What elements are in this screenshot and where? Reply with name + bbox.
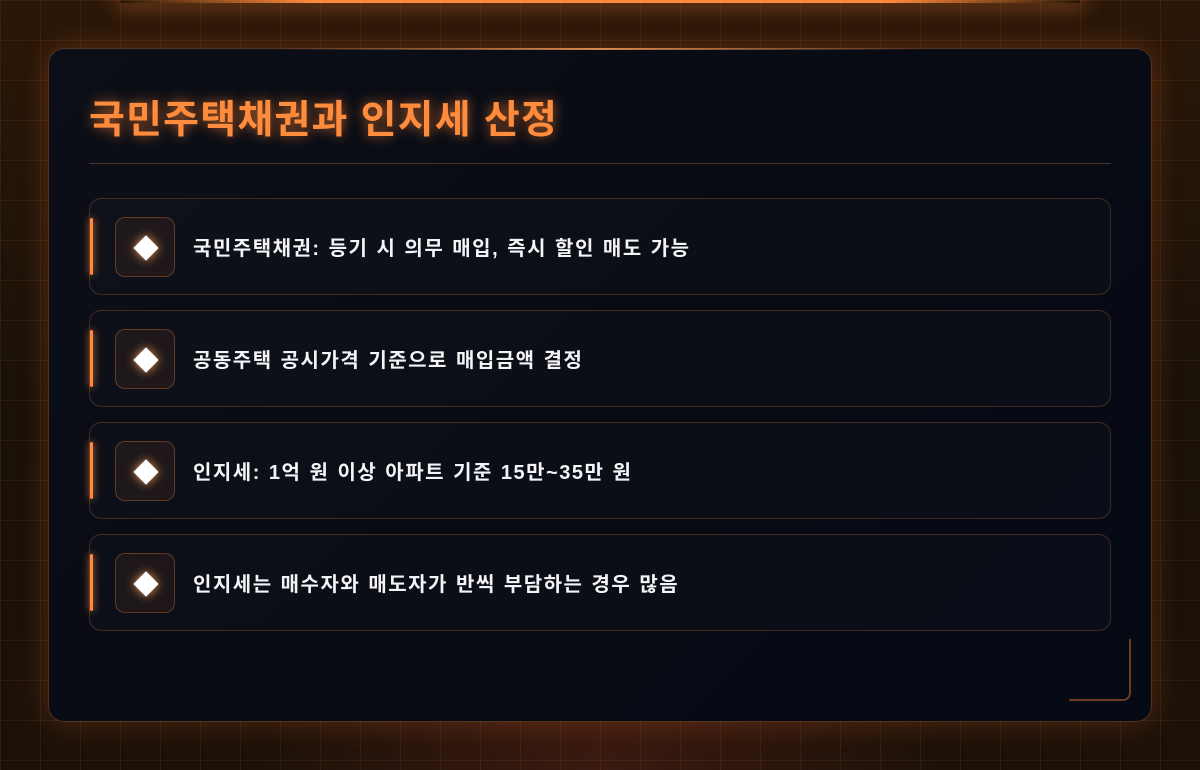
item 4 bbox=[89, 534, 1111, 631]
item 2 bbox=[89, 310, 1111, 407]
text 2: 공동주택 공시가격 기준으로 매입금액 결정 bbox=[193, 350, 583, 372]
item 3 bbox=[89, 422, 1111, 519]
icon: diamond bbox=[115, 329, 175, 389]
icon: diamond bbox=[115, 217, 175, 277]
icon: diamond bbox=[115, 441, 175, 501]
item 1 bbox=[89, 198, 1111, 295]
text 3: 인지세: 1억 원 이상 아파트 기준 15만~35만 원 bbox=[193, 462, 632, 484]
icon: diamond bbox=[115, 553, 175, 613]
text 1: 국민주택채권: 등기 시 의무 매입, 즉시 할인 매도 가능 bbox=[193, 238, 691, 260]
title: 국민주택채권과 인지세 산정 bbox=[89, 99, 558, 142]
text 4: 인지세는 매수자와 매도자가 반씩 부담하는 경우 많음 bbox=[193, 574, 679, 596]
